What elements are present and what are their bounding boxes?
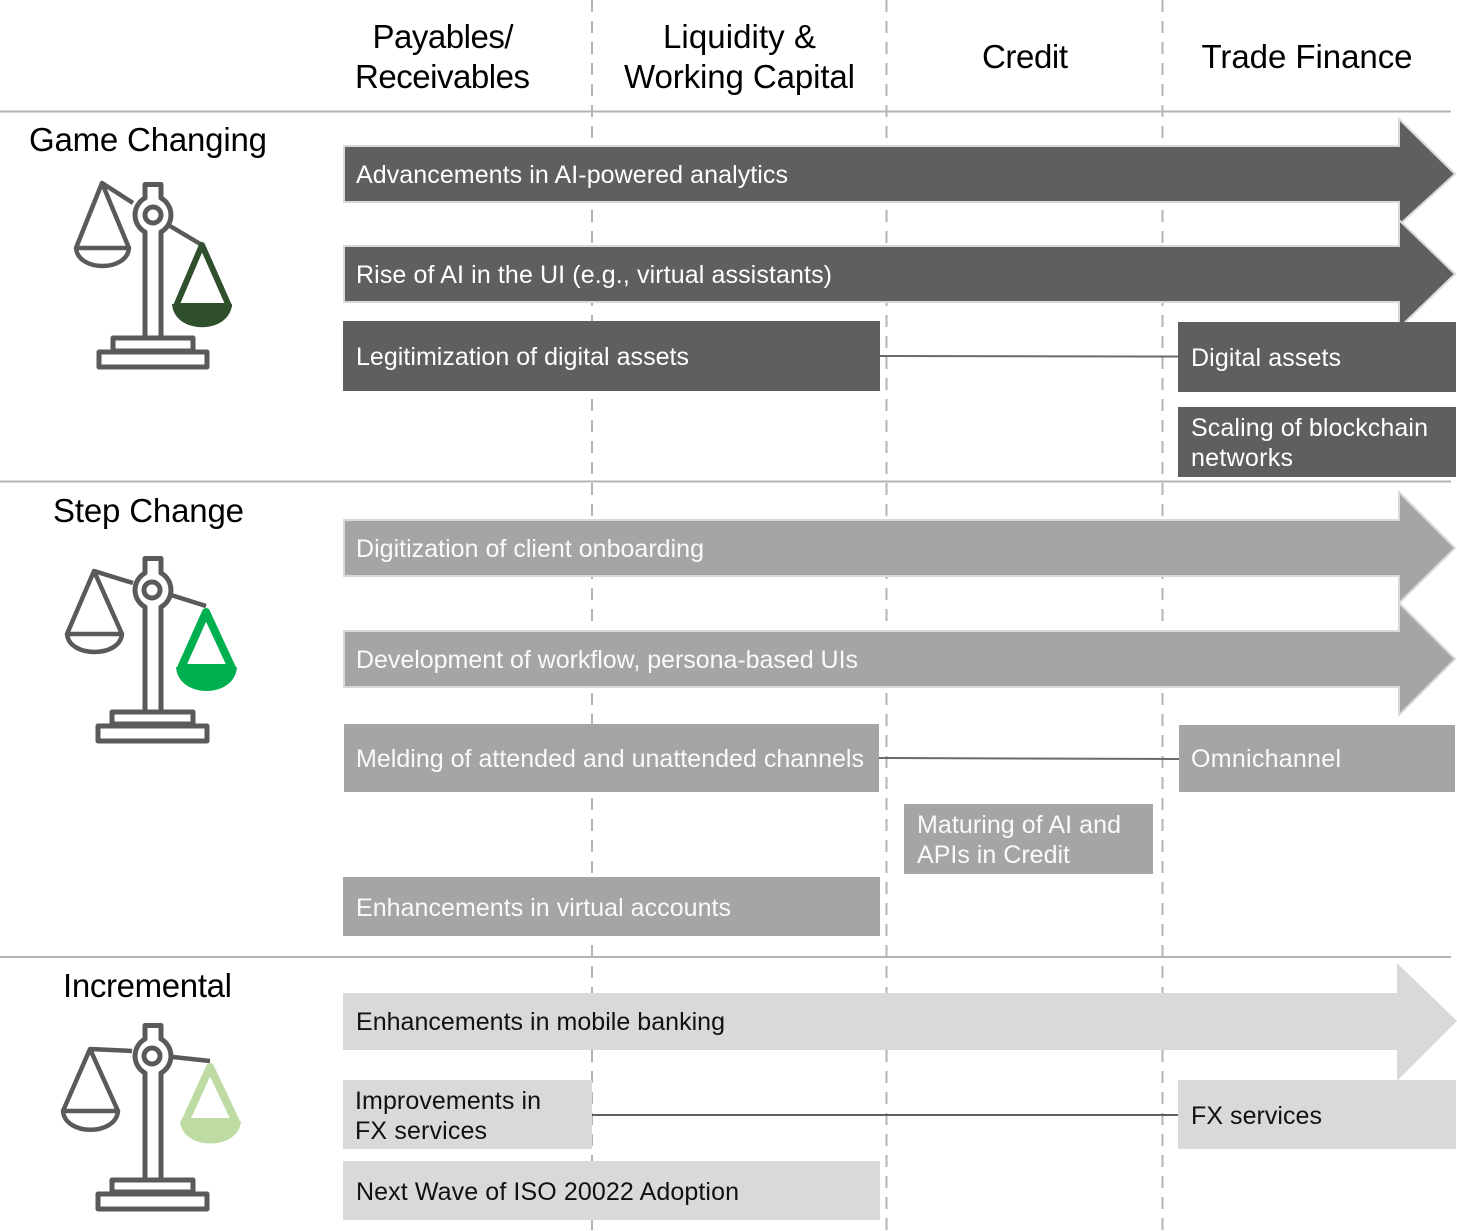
box: Next Wave of ISO 20022 Adoption: [343, 1161, 880, 1220]
column header: Payables/Receivables: Receivables: [355, 58, 530, 95]
connector: omnichannel: [879, 758, 1179, 759]
row heading: Step Change: Step Change: [53, 492, 244, 529]
column header: Trade Finance: Trade Finance: [1202, 38, 1412, 75]
column header: Liquidity & Working Capital: [624, 18, 855, 95]
box: Omnichannel: [1179, 725, 1455, 792]
row heading: Game Changing: Game Changing: [29, 121, 267, 158]
box: FX services: FX services: [1191, 1102, 1322, 1130]
column header: Liquidity & Working Capital: Liquidity &: [663, 18, 816, 55]
box: Scaling of blockchain networks: [1178, 407, 1456, 477]
arrow: Enhancements in mobile banking: Enhancements in mobile banking: [356, 1008, 725, 1036]
box: Enhancements in virtual accounts: [343, 877, 880, 936]
arrow: Development of workflow, persona-based UIs: Development of workflow, persona-based UIs: [356, 646, 858, 674]
column header: Payables/Receivables: Payables/: [372, 18, 514, 55]
arrow: Enhancements in mobile banking: [343, 963, 1457, 1081]
box: Improvements in FX services: FX services: [355, 1117, 487, 1145]
box: FX services: [1178, 1080, 1456, 1149]
row heading: Incremental: Incremental: [63, 967, 232, 1004]
box: Omnichannel: Omnichannel: [1191, 745, 1341, 773]
box: Legitimization of digital assets: Legitimization of digital assets: [356, 343, 689, 371]
box: Next Wave of ISO 20022 Adoption: Next Wave of ISO 20022 Adoption: [356, 1178, 739, 1206]
column header: Credit: Credit: [982, 38, 1068, 75]
icon: scale, dark green pan: [76, 183, 232, 367]
arrow: Digitization of client onboarding: [344, 492, 1455, 603]
box: Maturing of AI and APIs in Credit: [904, 804, 1153, 874]
arrow: Rise of AI in the UI: Rise of AI in the UI (e.g., virtual assistants): [356, 261, 832, 289]
arrow: Development of workflow, persona-based UIs: [344, 603, 1455, 715]
arrow: Rise of AI in the UI: [344, 220, 1455, 328]
box: Maturing of AI and APIs in Credit: Maturing of AI and: [917, 811, 1121, 839]
box: Improvements in FX services: [343, 1080, 592, 1149]
box: Improvements in FX services: Improvements in: [355, 1087, 541, 1115]
connector: FX services: [592, 1114, 1178, 1116]
column header: Liquidity & Working Capital: Working Capital: [624, 58, 855, 95]
column header: Payables/Receivables: [355, 18, 530, 95]
arrow: Advancements in AI-powered analytics: [344, 119, 1455, 225]
connector: digital assets: [880, 355, 1178, 358]
box: Melding of attended and unattended channels: Melding of attended and unattended channels: [356, 745, 864, 773]
box: Scaling of blockchain networks: Scaling of blockchain: [1191, 414, 1428, 442]
icon: scale, bright green pan: [67, 558, 237, 741]
box: Melding of attended and unattended channels: [344, 724, 879, 792]
box: Enhancements in virtual accounts: Enhancements in virtual accounts: [356, 894, 731, 922]
arrow: Advancements in AI-powered analytics: Advancements in AI-powered analytics: [356, 161, 788, 189]
arrow: Digitization of client onboarding: Digitization of client onboarding: [356, 535, 704, 563]
box: Digital assets: [1178, 322, 1456, 392]
box: Maturing of AI and APIs in Credit: APIs in Credit: [917, 841, 1070, 869]
box: Legitimization of digital assets: [343, 321, 880, 391]
icon: scale, light green pan: [63, 1026, 241, 1209]
box: Scaling of blockchain networks: networks: [1191, 444, 1293, 472]
box: Digital assets: Digital assets: [1191, 344, 1341, 372]
